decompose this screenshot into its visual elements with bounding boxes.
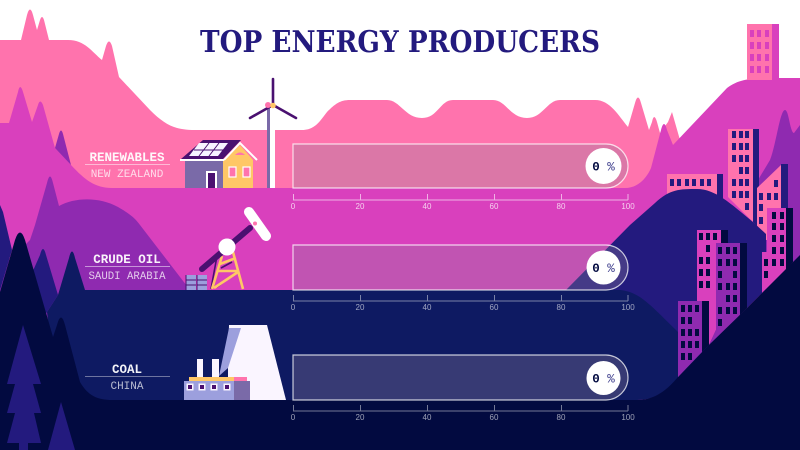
- building: slanted roof pink: [757, 164, 788, 240]
- building: magenta centre: [697, 230, 728, 345]
- building: tall pink: [728, 129, 759, 228]
- axis: renewables: 20: [356, 202, 365, 211]
- bar: coal: [293, 355, 628, 400]
- tree: small indigo: [48, 402, 75, 450]
- axis: crude oil: 100: [621, 303, 635, 312]
- axis: coal: 0: [291, 413, 296, 422]
- axis: crude oil: 20: [356, 303, 365, 312]
- axis: renewables: 40: [423, 202, 432, 211]
- axis: coal: 100: [621, 413, 635, 422]
- label: coal / china: CHINA: [110, 381, 144, 393]
- title: TOP ENERGY PRODUCERS: [200, 25, 600, 60]
- bar: crude oil: 0 %: [592, 262, 615, 276]
- building: purple tall: [709, 243, 747, 345]
- axis: coal: [291, 405, 635, 422]
- landscape: indigo hill: [566, 189, 766, 377]
- axis: renewables: 100: [621, 202, 635, 211]
- bar: renewables: 0 %: [592, 160, 615, 174]
- axis: crude oil: 0: [291, 303, 296, 312]
- label: coal / china: COAL: [112, 363, 142, 377]
- building: purple small: [678, 301, 709, 377]
- icon: coal power plant: [184, 325, 286, 400]
- building: magenta right: [762, 208, 793, 293]
- bar: renewables: [293, 144, 628, 188]
- label: renewables / new zealand: RENEWABLES: [89, 151, 165, 165]
- icon: oil pumpjack: [186, 212, 266, 290]
- icon: house with solar panels: [180, 140, 257, 188]
- axis: renewables: 60: [490, 202, 499, 211]
- axis: crude oil: [291, 295, 635, 312]
- building: low pink: [667, 174, 723, 204]
- landscape: indigo tree left: [20, 249, 58, 340]
- axis: coal: 80: [557, 413, 566, 422]
- axis: renewables: 0: [291, 202, 296, 211]
- landscape: purple hills left: [0, 130, 190, 450]
- landscape: dark foreground: [0, 232, 800, 450]
- landscape: navy ground: [47, 252, 678, 420]
- axis: renewables: [291, 194, 635, 211]
- axis: renewables: 80: [557, 202, 566, 211]
- label: crude oil / saudi arabia: CRUDE OIL: [93, 253, 161, 267]
- landscape: indigo sliver at left edge: [0, 205, 12, 290]
- axis: coal: 20: [356, 413, 365, 422]
- icon: wind turbine: [250, 79, 296, 188]
- label: crude oil / saudi arabia: [85, 253, 170, 283]
- axis: crude oil: 60: [490, 303, 499, 312]
- building: top tower: [747, 24, 779, 80]
- bar: coal: 0 %: [592, 372, 615, 386]
- label: coal / china: [85, 363, 170, 393]
- landscape: purple hill right: [758, 110, 800, 450]
- label: renewables / new zealand: [85, 151, 170, 181]
- axis: crude oil: 40: [423, 303, 432, 312]
- label: renewables / new zealand: NEW ZEALAND: [91, 169, 164, 181]
- axis: coal: 60: [490, 413, 499, 422]
- tree: large indigo: [7, 325, 41, 450]
- axis: coal: 40: [423, 413, 432, 422]
- bar: crude oil: [293, 245, 628, 290]
- label: crude oil / saudi arabia: SAUDI ARABIA: [89, 271, 166, 283]
- axis: crude oil: 80: [557, 303, 566, 312]
